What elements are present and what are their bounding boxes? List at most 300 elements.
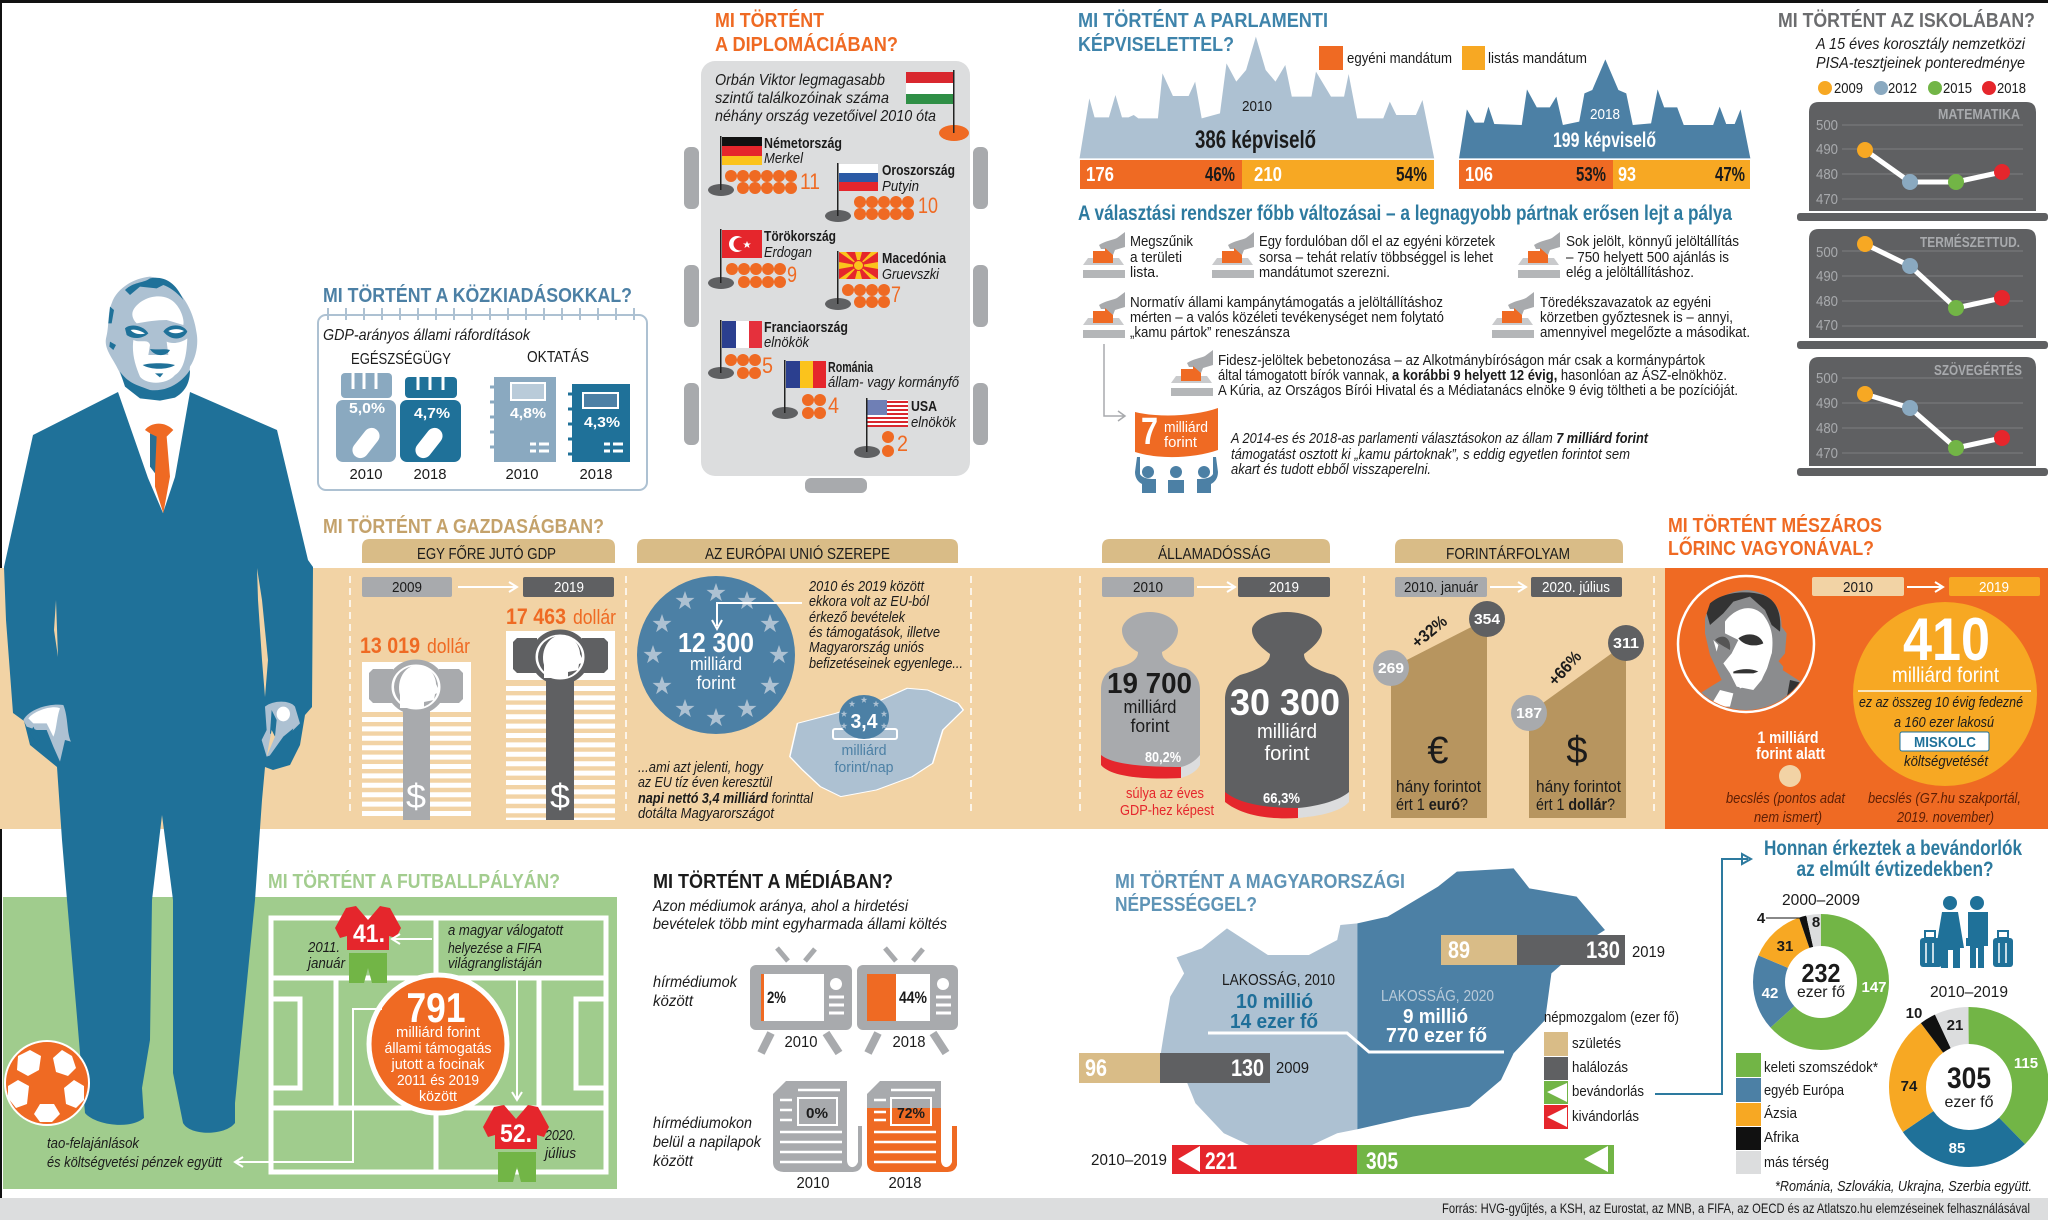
estimate notes: becslés (pontos adat: [1726, 790, 1846, 807]
donut 2000-2009: 8: [1812, 914, 1820, 931]
Hungary piggy map: forint/nap: [834, 759, 894, 776]
change 4: mérten – a valós közéleti tevékenységet nem folytató: [1130, 309, 1444, 326]
donut 2010-2019: 10: [1906, 1005, 1922, 1022]
debt years: 2019: [1269, 579, 1299, 596]
subtitle: A 15 éves korosztály nemzetközi: [1815, 36, 2025, 53]
change 3: – 750 helyett 500 ajánlás is: [1566, 249, 1729, 266]
arm gaps: [54, 568, 268, 697]
donut 2000-2009: 4: [1757, 910, 1766, 927]
Germany: 11: [800, 169, 820, 194]
change 5: körzetben győztesnek is – annyi,: [1540, 309, 1733, 326]
years: 2019: [1979, 579, 2009, 596]
change 2: [1212, 232, 1495, 281]
section: parliament: [1078, 9, 1750, 493]
legend: Afrika: [1764, 1129, 1800, 1146]
chart: science: 490: [1816, 268, 1838, 285]
section: immigrants: [1736, 837, 2038, 1195]
icon: protest banner: [1135, 408, 1218, 493]
2019 wealth circle: költségvetését: [1904, 753, 1989, 770]
pill bottle 2018: 2018: [414, 466, 446, 483]
newspapers label: között: [653, 1153, 694, 1170]
chart: mathematics: 500: [1816, 117, 1838, 134]
change 2: Egy fordulóban dől el az egyéni körzetek: [1259, 233, 1495, 250]
dollar chart: ért 1 dollár?: [1536, 795, 1615, 814]
orange panel: [1665, 568, 2048, 829]
exchange rate dates: 2010. január: [1404, 579, 1478, 596]
2018 seat bar: 93: [1618, 164, 1636, 186]
section: media: [652, 870, 958, 1192]
chart: science: 500: [1816, 244, 1838, 261]
France: Franciaország: [764, 319, 848, 336]
GDP 2009 banknote: dollár: [427, 636, 470, 658]
section: economy: [323, 515, 1654, 822]
Germany: Németország: [764, 135, 842, 152]
legend: egyéb Európa: [1764, 1082, 1845, 1099]
USA: [854, 398, 957, 458]
pill bottle 2018: [400, 377, 461, 483]
note: [47, 1135, 223, 1171]
Hungary piggy map: milliárd: [842, 742, 886, 759]
chart: reading: 500: [1816, 370, 1838, 387]
legend: 2018: [1997, 80, 2026, 97]
Turkey: Erdogan: [764, 244, 812, 261]
estimate notes: becslés (G7.hu szakportál,: [1868, 790, 2021, 807]
footer bar: [0, 1198, 2048, 1220]
subtitle: Azon médiumok aránya, ahol a hirdetési: [652, 898, 908, 915]
791 circle: jutott a focinak: [391, 1056, 485, 1073]
chart: mathematics: 490: [1816, 141, 1838, 158]
heading: LŐRINC VAGYONÁVAL?: [1668, 537, 1874, 560]
EU consequence: napi nettó 3,4 milliárd forinttal: [638, 790, 814, 807]
notebook frame: [318, 308, 647, 490]
icon: protest banner: 7: [1141, 411, 1158, 453]
column labels: [351, 347, 589, 368]
change 6: által támogatott bírók vannak, a korábbi 9 helyett 12 évig, hasonlóan az ÁSZ-elnökhöz.: [1218, 367, 1727, 384]
estimate notes: 2019. november): [1896, 809, 1994, 826]
book 2010: 2010: [506, 466, 538, 483]
change 2: mandátumot szerezni.: [1259, 264, 1390, 281]
Russia: 10: [918, 193, 938, 218]
bar 2009: [1079, 1053, 1309, 1083]
connector arrow: [1655, 854, 1751, 1094]
pitch: [271, 918, 606, 1172]
change 4: „kamu pártok” reneszánsza: [1130, 324, 1291, 341]
donut 2010-2019: [1901, 984, 2038, 1157]
chart: mathematics: [1797, 102, 2048, 221]
population 2010: [1222, 970, 1335, 1033]
donut 2010-2019: 21: [1947, 1017, 1963, 1034]
Orbán figure: [4, 277, 313, 1133]
subtitle: GDP-arányos állami ráfordítások: [323, 327, 531, 344]
bar 2019: [1441, 935, 1665, 965]
USA: 2: [897, 431, 908, 456]
tab: exchange rate: [1395, 539, 1623, 563]
bar 2019: 130: [1586, 937, 1620, 964]
TV 2018: [857, 948, 958, 1053]
legend: 2009: [1834, 80, 1863, 97]
newspapers label: [653, 1115, 762, 1170]
2019 wealth circle: 410: [1903, 606, 1990, 673]
legend: más térség: [1764, 1154, 1829, 1171]
legend: [1736, 1053, 1878, 1174]
2018 seat bar: 106: [1465, 164, 1493, 186]
change 5: [1492, 292, 1750, 341]
pill bottle 2010: 5,0%: [349, 400, 385, 417]
book 2010: [490, 377, 556, 483]
2010 seat bar: 176: [1086, 164, 1114, 186]
GDP 2009 banknote: 13 019: [360, 633, 420, 658]
movement legend: bevándorlás: [1572, 1083, 1644, 1100]
7 billion note: akart és tudott ebből visszaperelni.: [1231, 461, 1431, 478]
chart: science: 470: [1816, 317, 1838, 334]
subheading: A választási rendszer főbb változásai – a legnagyobb pártnak erősen lejt a pálya: [1078, 202, 1732, 225]
subtitle: PISA-tesztjeinek ponteredménye: [1816, 55, 2025, 72]
newspaper 2010: 0%: [806, 1105, 828, 1122]
chart: reading: 490: [1816, 395, 1838, 412]
USA: USA: [911, 398, 937, 415]
connector arrow: [1104, 344, 1125, 421]
debt caption: GDP-hez képest: [1120, 802, 1215, 819]
heading: [715, 9, 898, 56]
GDP 2019 banknote: dollár: [573, 607, 616, 629]
icon: soccer ball: [5, 1041, 89, 1125]
legend: [1818, 80, 2026, 97]
legend: 2012: [1888, 80, 1917, 97]
change 5: Töredékszavazatok az egyéni: [1540, 294, 1711, 311]
column labels: OKTATÁS: [527, 347, 589, 366]
bar 2019: 2019: [1632, 944, 1665, 961]
dollar chart: [1511, 625, 1644, 818]
head: [106, 277, 197, 401]
EU consequence: az EU tíz éven keresztül: [638, 774, 773, 791]
news media label: [653, 974, 738, 1010]
2010 seat bar: 46%: [1205, 164, 1235, 186]
EU explanation: ekkora volt az EU-ból: [809, 593, 930, 610]
weight 2010: milliárd: [1124, 697, 1176, 717]
weight 2019: milliárd: [1257, 721, 1317, 743]
EU explanation: 2010 és 2019 között: [808, 578, 925, 595]
tab: exchange rate: FORINTÁRFOLYAM: [1446, 544, 1570, 563]
weight 2010: 19 700: [1107, 668, 1192, 700]
GDP 2019 banknote: 17 463: [506, 604, 566, 629]
legend: listás mandátum: [1488, 50, 1587, 67]
chart: reading: 470: [1816, 445, 1838, 462]
ranking text: világranglistáján: [448, 955, 542, 972]
population 2010: 14 ezer fő: [1230, 1011, 1318, 1033]
donut 2000-2009: 2000–2009: [1782, 892, 1860, 909]
news media label: között: [653, 993, 694, 1010]
EU consequence: dotálta Magyarországot: [638, 805, 775, 822]
dollar chart: 311: [1613, 635, 1639, 652]
GDP 2009 banknote: [360, 633, 471, 820]
newspaper 2010: 2010: [796, 1175, 830, 1192]
ranking text: [306, 922, 576, 1162]
icon: travellers: [1920, 896, 2013, 968]
change 2: sorsa – tehát relatív többséggel is lehet: [1259, 249, 1494, 266]
Macedonia: [825, 250, 947, 310]
migration bar: 2010–2019: [1091, 1152, 1167, 1169]
donut 2000-2009: 42: [1762, 985, 1778, 1002]
dollar chart: 187: [1516, 705, 1542, 722]
intro text: néhány ország vezetőivel 2010 óta: [715, 108, 936, 125]
euro chart: 354: [1474, 611, 1501, 628]
2018 seat bar: 47%: [1715, 164, 1745, 186]
donut 2010-2019: ezer fő: [1944, 1094, 1994, 1111]
Turkey: [708, 228, 836, 289]
ranking text: helyezése a FIFA: [448, 940, 542, 957]
ranking text: július: [543, 1145, 576, 1162]
Germany: [708, 135, 842, 196]
chart: mathematics: 480: [1816, 166, 1838, 183]
TV 2018: 2018: [892, 1034, 926, 1051]
jersey 41: [335, 906, 401, 983]
donut 2000-2009: 31: [1777, 938, 1793, 955]
heading: MI TÖRTÉNT A GAZDASÁGBAN?: [323, 515, 604, 538]
note: tao-felajánlások: [47, 1135, 140, 1152]
heading: az elmúlt évtizedekben?: [1796, 858, 1994, 881]
EU explanation: [808, 578, 963, 672]
euro chart: 269: [1378, 660, 1404, 677]
change 3: elég a jelöltállításhoz.: [1566, 264, 1694, 281]
heading: [1115, 870, 1405, 916]
book 2018: [568, 384, 630, 483]
newspapers label: hírmédiumokon: [653, 1115, 752, 1132]
legend: 2015: [1943, 80, 1972, 97]
Turkey: Törökország: [764, 228, 836, 245]
section: population: [1079, 854, 1751, 1175]
France: elnökök: [764, 334, 810, 351]
jersey 41: 41.: [353, 920, 385, 948]
Romania: állam- vagy kormányfő: [828, 374, 960, 391]
donut 2010-2019: 2010–2019: [1930, 984, 2008, 1001]
bar 2019: 89: [1448, 937, 1470, 964]
heading: A DIPLOMÁCIÁBAN?: [715, 33, 898, 56]
weight 2010: 80,2%: [1145, 749, 1181, 766]
heading: MI TÖRTÉNT A MÉDIÁBAN?: [653, 870, 893, 893]
2018 seat bar: [1459, 160, 1750, 189]
heading: KÉPVISELETTEL?: [1078, 33, 1234, 56]
bar 2009: 96: [1085, 1055, 1107, 1082]
book 2018: 4,3%: [584, 414, 620, 431]
heading: [1764, 837, 2022, 881]
2010 seat bar: 54%: [1396, 164, 1427, 186]
weight 2019: [1225, 612, 1349, 818]
Romania: [772, 359, 960, 419]
book 2018: 2018: [580, 466, 612, 483]
migration bar: 305: [1366, 1148, 1398, 1175]
791 circle: milliárd forint: [396, 1024, 481, 1041]
chart: reading: 480: [1816, 420, 1838, 437]
intro text: Orbán Viktor legmagasabb: [715, 72, 885, 89]
weight 2019: 30 300: [1230, 682, 1340, 723]
chart: science: 480: [1816, 293, 1838, 310]
migration bar: 221: [1205, 1148, 1237, 1175]
tab: GDP per capita: EGY FŐRE JUTÓ GDP: [417, 544, 556, 563]
map of Hungary west: [1161, 923, 1357, 1145]
section: school: [1778, 9, 2048, 476]
estimate notes: nem ismert): [1754, 809, 1822, 826]
2010 wealth: [1756, 728, 1825, 787]
France: 5: [762, 353, 773, 378]
change 4: [1083, 292, 1444, 341]
pill bottle 2010: 2010: [350, 466, 382, 483]
EU consequence: [638, 759, 814, 822]
pill bottle 2018: 4,7%: [414, 405, 450, 422]
population 2020: [1381, 986, 1494, 1047]
newspaper 2018: [867, 1081, 957, 1192]
euro chart: hány forintot: [1396, 777, 1481, 796]
7 billion note: [1230, 430, 1649, 478]
movement legend: születés: [1572, 1035, 1621, 1052]
2018 figures: [1553, 106, 1656, 152]
intro text: [715, 72, 936, 125]
map of Hungary east: [1357, 868, 1605, 1129]
Romania: 4: [828, 393, 839, 418]
population 2020: 9 millió: [1403, 1006, 1468, 1028]
euro chart: [1373, 601, 1505, 818]
newspaper 2018: 2018: [888, 1175, 922, 1192]
years: [1812, 577, 2040, 596]
movement legend: népmozgalom (ezer fő): [1544, 1009, 1679, 1026]
ranking text: 2011.: [307, 939, 340, 956]
debt caption: súlya az éves: [1126, 785, 1204, 802]
791 circle: 2011 és 2019: [397, 1072, 479, 1089]
parliament silhouette 2010: [1080, 37, 1434, 158]
791 circle: 791: [406, 984, 466, 1031]
Turkey: 9: [787, 262, 797, 287]
GDP years: 2009: [392, 579, 422, 596]
newspaper 2010: [773, 1081, 862, 1192]
2010 wealth: 1 milliárd: [1758, 728, 1818, 747]
heading: MI TÖRTÉNT A KÖZKIADÁSOKKAL?: [323, 284, 632, 307]
ranking text: 2020.: [544, 1127, 576, 1144]
chart: mathematics: MATEMATIKA: [1938, 106, 2020, 123]
arrows: [235, 934, 522, 1167]
7 billion note: támogatást osztott ki „kamu pártoknak”, s eddig egyetlen forintot sem: [1231, 446, 1630, 463]
donut 2010-2019: 115: [2014, 1055, 2038, 1072]
icon: protest banner: forint: [1164, 434, 1198, 451]
tab: EU: [637, 539, 958, 563]
legend: [1319, 46, 1587, 70]
USA: elnökök: [911, 414, 957, 431]
section: football: [5, 870, 606, 1182]
ranking text: január: [306, 955, 346, 972]
Hungary piggy map: 3,4: [850, 711, 878, 733]
dollar chart: +66%: [1544, 647, 1585, 690]
change 1: a területi: [1130, 249, 1182, 266]
change 3: [1518, 232, 1739, 281]
2010 figures: 386 képviselő: [1195, 126, 1316, 154]
weight 2019: forint: [1264, 743, 1310, 765]
EU coin: [637, 576, 802, 734]
Hungary piggy map: [790, 688, 963, 797]
population 2010: LAKOSSÁG, 2010: [1222, 970, 1335, 989]
estimate notes: [1726, 790, 2021, 826]
weight 2019: 66,3%: [1263, 790, 1300, 807]
2019 wealth circle: a 160 ezer lakosú: [1894, 714, 1995, 731]
donut 2000-2009: 147: [1861, 979, 1887, 996]
pill bottle 2010: [336, 373, 396, 483]
Russia: Putyin: [882, 178, 919, 195]
subtitle: [652, 898, 947, 933]
population 2010: 10 millió: [1236, 991, 1313, 1013]
migration bar: [1091, 1145, 1614, 1175]
legend: Ázsia: [1764, 1105, 1798, 1122]
Macedonia: Macedónia: [882, 250, 947, 267]
EU explanation: és támogatások, illetve: [809, 624, 940, 641]
suit: [4, 392, 313, 1133]
EU explanation: érkező bevételek: [809, 609, 906, 626]
2010 seat bar: [1080, 160, 1434, 189]
EU coin: milliárd: [690, 654, 742, 674]
dollar chart: $: [1566, 730, 1588, 772]
weight 2010: forint: [1130, 716, 1170, 736]
chart: reading: [1797, 357, 2048, 476]
EU consequence: ...ami azt jelenti, hogy: [638, 759, 764, 776]
subtitle: bevételek több mint egyharmada állami költés: [653, 916, 947, 933]
tab: debt: ÁLLAMADÓSSÁG: [1158, 544, 1271, 563]
book 2010: 4,8%: [510, 405, 546, 422]
newspapers label: belül a napilapok: [653, 1134, 762, 1151]
change 1: Megszűnik: [1130, 233, 1193, 250]
legend: egyéni mandátum: [1347, 50, 1452, 67]
bar 2009: 130: [1231, 1055, 1264, 1082]
2018 figures: 2018: [1590, 106, 1620, 123]
ranking text: a magyar válogatott: [448, 922, 564, 939]
GDP years: [362, 577, 614, 597]
parliament silhouette 2018: [1459, 59, 1750, 158]
subtitle: [1815, 36, 2025, 72]
economy tan band: [0, 568, 1665, 829]
791 circle: [369, 975, 507, 1113]
791 circle: között: [419, 1088, 458, 1105]
chart: reading: SZÖVEGÉRTÉS: [1934, 362, 2022, 379]
jersey 52: 52.: [500, 1120, 532, 1148]
change 5: amennyivel megelőzte a másodikat.: [1540, 324, 1750, 341]
legend: keleti szomszédok*: [1764, 1059, 1878, 1076]
euro chart: +32%: [1408, 612, 1451, 652]
donut 2000-2009: 232: [1802, 958, 1840, 988]
movement legend: kivándorlás: [1572, 1108, 1639, 1125]
2019 wealth circle: MISKOLC: [1914, 734, 1976, 751]
chart: science: [1797, 229, 2048, 349]
tie: [145, 424, 173, 513]
chart: science: TERMÉSZETTUD.: [1920, 234, 2020, 251]
France: [708, 319, 848, 379]
2019 wealth circle: [1853, 602, 2037, 786]
heading: MI TÖRTÉNT A FUTBALLPÁLYÁN?: [268, 870, 560, 893]
EU explanation: Magyarország uniós: [809, 639, 924, 656]
donut 2010-2019: 85: [1949, 1140, 1965, 1157]
2019 wealth circle: milliárd forint: [1892, 664, 1999, 687]
GDP years: 2019: [554, 579, 584, 596]
football field background: [3, 897, 617, 1189]
debt caption: [1120, 785, 1215, 819]
dollar chart: hány forintot: [1536, 777, 1621, 796]
heading: MI TÖRTÉNT: [715, 9, 824, 32]
TV 2010: [750, 948, 852, 1053]
section: public spending: [318, 284, 647, 490]
tab: debt: [1102, 539, 1330, 563]
2010 figures: 2010: [1242, 98, 1272, 115]
Russia: [825, 162, 955, 222]
years: 2010: [1843, 579, 1873, 596]
2010 seat bar: 210: [1254, 164, 1282, 186]
donut 2000-2009: ezer fő: [1797, 984, 1845, 1001]
flag: Hungary: [906, 70, 969, 141]
change 3: Sok jelölt, könnyű jelöltállítás: [1566, 233, 1739, 250]
section: diplomacy: [684, 9, 988, 493]
